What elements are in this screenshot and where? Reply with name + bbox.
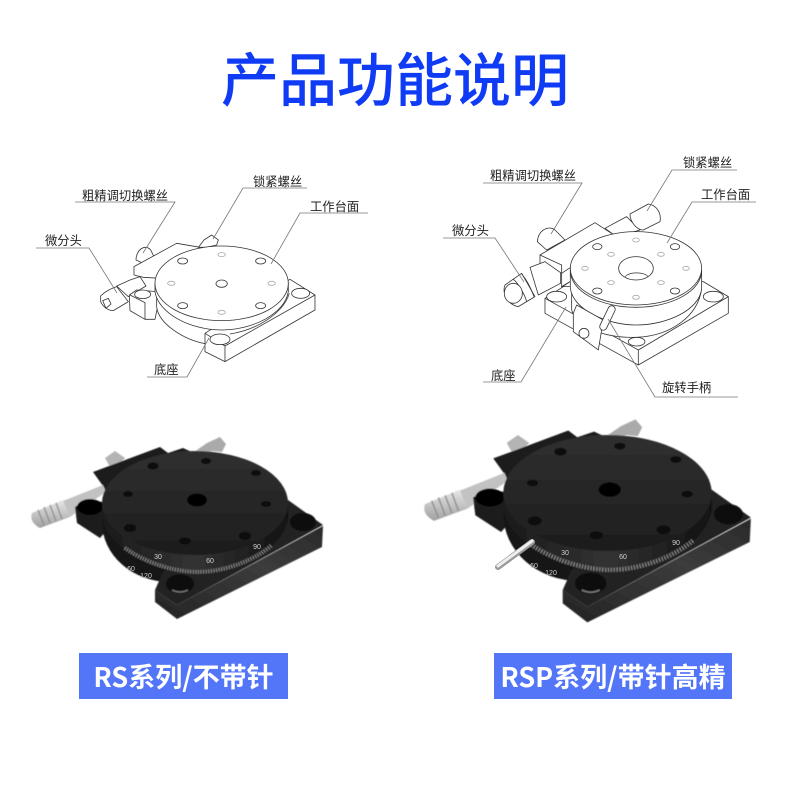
label: coarse/fine switch screw [75,189,175,253]
label: rotating handle [608,319,738,397]
label: base: 底座 [491,368,516,383]
title: 产品功能说明 [221,34,569,118]
pin handle [498,541,532,567]
photo: RS series stage [31,437,323,619]
base plate [545,282,728,365]
lock screw [198,235,218,247]
label: base [483,307,566,383]
label: work table [271,199,368,264]
labels: RS series [36,174,368,377]
base plate [205,279,315,362]
micrometer head [101,277,146,311]
scale numbers [530,540,680,577]
scale numbers [127,544,261,580]
button: RSP series: RSP系列/带针高精 [500,656,726,695]
micrometer head [504,262,561,307]
label: base: 底座 [154,362,179,377]
rotating handle clamp [573,305,612,350]
rear block and knob [134,243,200,278]
scale numbers: 60 [127,566,135,573]
label: base [147,338,209,377]
label: work table [667,187,756,243]
label: lock screw: 锁紧螺丝 [253,174,302,189]
lock screw [630,204,660,230]
scale numbers: 120 [545,570,557,577]
diagram: RS series line drawing [101,235,315,362]
label: rotating handle: 旋转手柄 [662,380,711,395]
left ear [129,290,158,319]
label: coarse/fine switch screw: 粗精调切换螺丝 [82,189,168,203]
rotary body [157,293,290,344]
label: micrometer [443,224,524,282]
diagram: RSP series line drawing [504,204,728,365]
label: work table: 工作台面 [701,187,750,202]
work table disc [570,232,702,325]
scale numbers: 30 [154,554,162,561]
label: lock screw: 锁紧螺丝 [683,155,732,170]
label: coarse/fine switch screw [483,169,582,234]
photo: RSP series stage [424,419,751,622]
scale numbers: 90 [672,540,680,547]
label: micrometer: 微分头 [452,224,489,238]
label: coarse/fine switch screw: 粗精调切换螺丝 [490,169,576,183]
scale numbers: 60 [619,554,627,561]
scale numbers: 60 [530,563,538,570]
scale numbers: 90 [253,544,261,551]
rear block and knob [537,217,640,287]
rotary body [572,288,702,337]
scale numbers: 120 [140,573,152,580]
scale numbers: 60 [206,558,214,565]
button: RS series: RS系列/不带针 [93,656,274,695]
labels: RSP series [443,155,756,397]
label: lock screw [647,155,737,211]
scale numbers: 30 [561,550,569,557]
label: micrometer [36,234,117,293]
label: micrometer: 微分头 [45,234,82,248]
label: work table: 工作台面 [310,199,359,214]
label: lock screw [213,174,307,239]
work table disc [155,246,288,330]
